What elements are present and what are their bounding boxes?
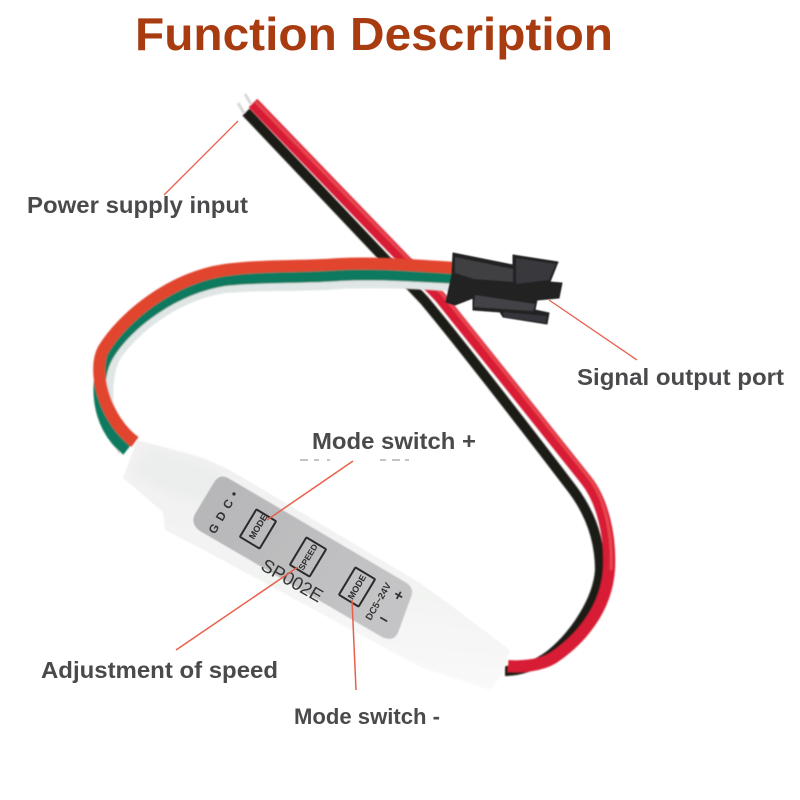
label: adjustment of speed: Adjustment of speed — [41, 657, 278, 683]
button: speed — [290, 537, 326, 577]
leader line: signal output — [549, 300, 637, 360]
leader line: power supply — [164, 121, 238, 195]
power cable: red and black pair — [238, 94, 611, 671]
button: mode plus: MODE — [247, 513, 269, 541]
button: mode minus: MODE — [346, 573, 368, 601]
controller module body — [123, 440, 510, 690]
label: mode switch plus: Mode switch + — [312, 428, 476, 454]
connector: black plug — [446, 253, 562, 324]
leader line: speed — [176, 567, 298, 650]
controller label plate — [193, 476, 412, 639]
button: speed: SPEED — [296, 542, 320, 572]
plate text: G D C: G D C • — [206, 488, 242, 536]
erased text remnant — [300, 459, 409, 461]
leader line: mode minus — [352, 600, 356, 690]
three-wire signal cable — [99, 263, 458, 452]
leader line: mode plus — [267, 461, 353, 520]
plate text: plus: + — [390, 586, 407, 606]
label: mode switch minus: Mode switch - — [294, 704, 440, 729]
label: signal output port: Signal output port — [577, 364, 784, 390]
button: mode minus — [339, 567, 375, 607]
button: mode plus — [240, 509, 276, 549]
plate text: voltage: DC5~24V — [364, 580, 394, 622]
plate text: minus: − — [375, 610, 392, 630]
plate text: model: SP002E — [258, 554, 327, 606]
title: Function Description — [135, 8, 613, 60]
label: power supply input: Power supply input — [27, 192, 248, 218]
